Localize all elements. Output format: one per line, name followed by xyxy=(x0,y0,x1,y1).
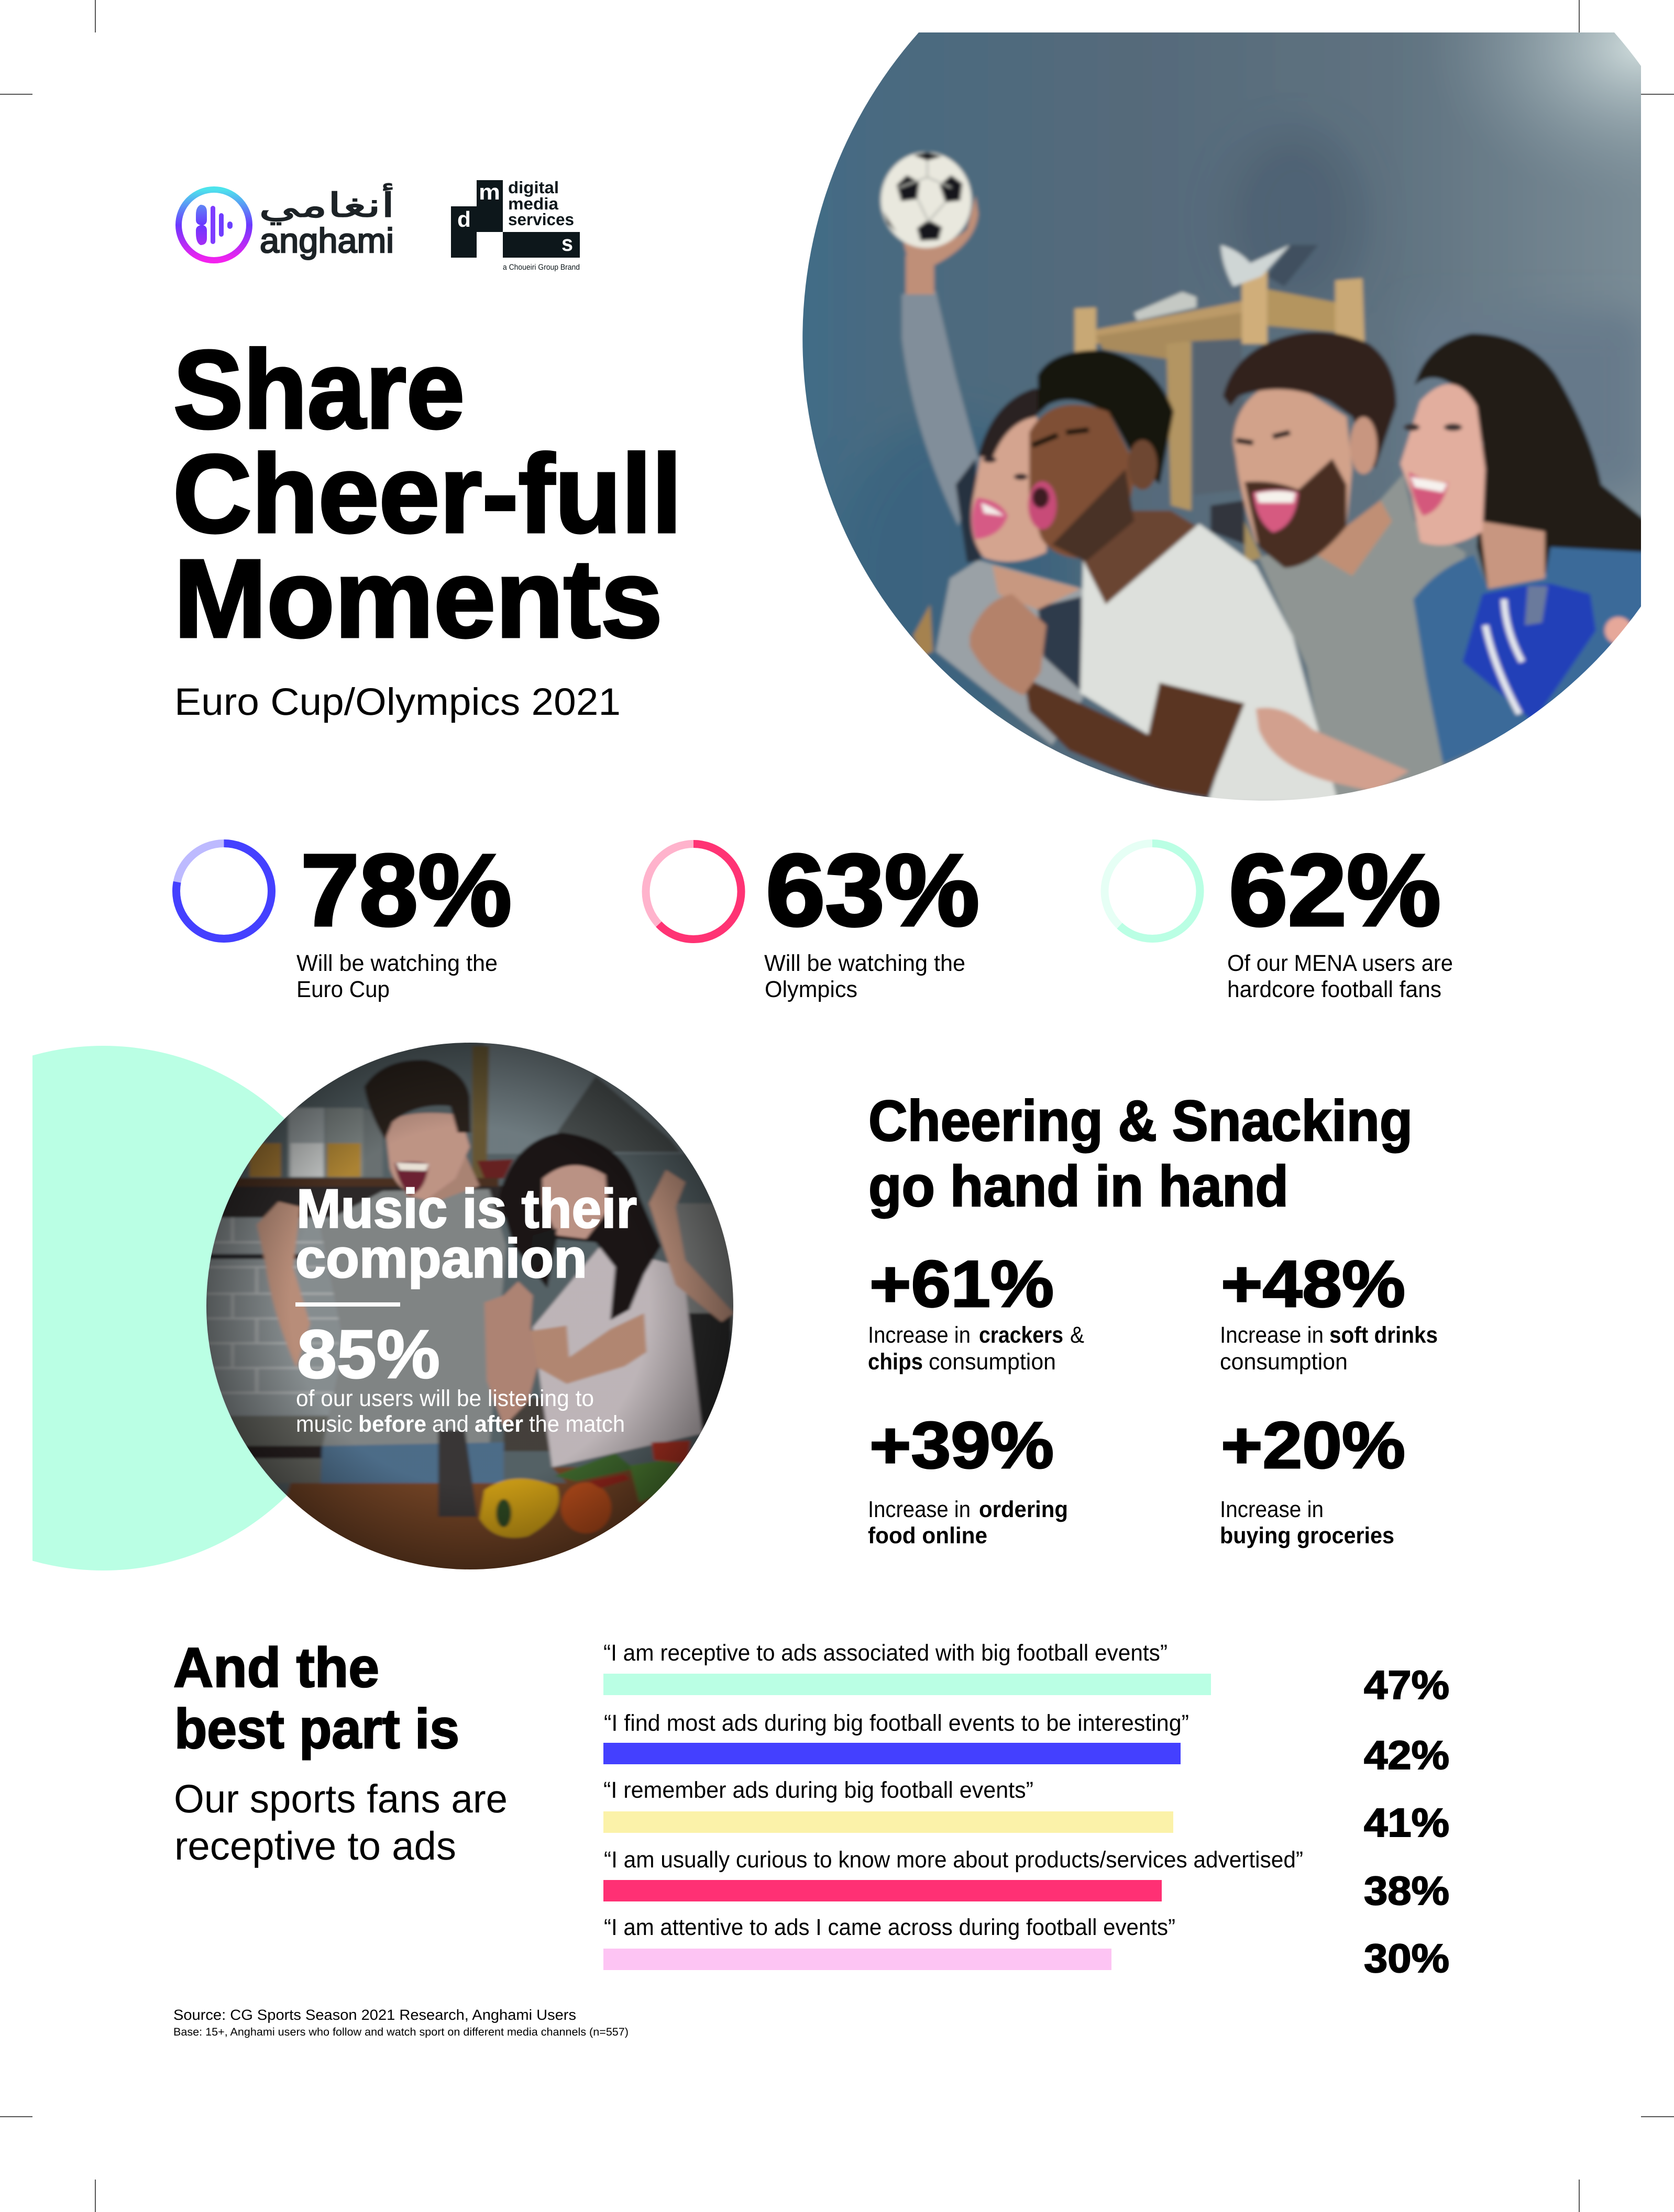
description xyxy=(296,1386,625,1437)
photo: friends cheering with a football xyxy=(802,32,1641,801)
wordmark: Arabic: أنغامي xyxy=(259,183,395,225)
logo: digital media services: m xyxy=(479,180,500,204)
mint background circle xyxy=(0,1046,366,1570)
description: before xyxy=(358,1411,426,1437)
statistic: 85% xyxy=(297,1315,440,1392)
heading: companion xyxy=(295,1228,587,1289)
stat: +39%: +39% xyxy=(869,1408,1054,1482)
bar: interesting 42%: “I find most ads during big football events to be interesting” xyxy=(604,1710,1189,1736)
subheading: Our sports fans are xyxy=(174,1777,508,1821)
icon: Anghami ring xyxy=(179,190,249,260)
stat: 78% Euro Cup xyxy=(176,833,512,1002)
callout: music is their companion xyxy=(295,1178,637,1437)
lower clenched hand xyxy=(1256,708,1409,792)
logo: digital media services: d xyxy=(457,207,471,231)
logo: digital media services xyxy=(451,178,580,272)
woman on left xyxy=(936,560,1083,745)
heading: Music is their xyxy=(296,1178,637,1240)
raised arm sleeve xyxy=(902,291,978,526)
stat: 62% football fans: hardcore football fans xyxy=(1227,977,1441,1002)
bar: receptive 47%: 47% xyxy=(1364,1663,1449,1708)
description: after xyxy=(475,1411,523,1437)
donut: 78% xyxy=(176,843,271,938)
stat: +61%: crackers xyxy=(979,1322,1063,1348)
stat: +61%: chips xyxy=(868,1349,923,1375)
bar: remember 41% xyxy=(603,1777,1449,1845)
title xyxy=(173,327,682,660)
logo: digital media services: media xyxy=(508,194,558,213)
stat: +20% xyxy=(1220,1408,1405,1549)
bar: interesting 42%: 42% xyxy=(1364,1733,1449,1778)
stat: +61%: Increase in xyxy=(868,1322,971,1348)
description: and xyxy=(432,1411,469,1437)
stat: +39%: ordering xyxy=(979,1497,1068,1522)
title: Moments xyxy=(174,536,663,660)
heading: Cheering & Snacking: go hand in hand xyxy=(868,1154,1288,1219)
heading: Cheering & Snacking: Cheering & Snacking xyxy=(868,1089,1413,1153)
logo: digital media services: services xyxy=(508,210,574,229)
donut: 63% xyxy=(646,844,741,939)
man singing xyxy=(320,1189,506,1447)
stat: +20%: buying groceries xyxy=(1220,1523,1394,1549)
woman singing xyxy=(533,1246,702,1467)
football xyxy=(881,152,972,248)
stat: +20%: +20% xyxy=(1221,1408,1405,1482)
stat: 78% Euro Cup: Will be watching the xyxy=(296,950,498,976)
source note xyxy=(173,2007,629,2038)
bar: curious 38%: “I am usually curious to know more about products/services advertised” xyxy=(604,1847,1303,1873)
description: music xyxy=(296,1411,353,1437)
stat: +48%: +48% xyxy=(1221,1247,1405,1321)
subtitle: Euro Cup/Olympics 2021 xyxy=(174,681,621,723)
logo: digital media services: a Choueiri Group Brand xyxy=(503,263,580,272)
subheading: receptive to ads xyxy=(174,1824,456,1868)
heading: And the best part is xyxy=(173,1636,459,1760)
stat: +61%: consumption xyxy=(929,1349,1056,1375)
logo: Anghami xyxy=(179,183,395,260)
donut: 62% xyxy=(1105,843,1200,938)
title: Share xyxy=(173,327,465,451)
source note: Source: CG Sports Season 2021 Research, Anghami Users xyxy=(173,2007,576,2023)
bar chart: attitudes to ads xyxy=(603,1640,1449,1981)
logo: digital media services: s xyxy=(561,231,573,256)
stat: 63% Olympics: 63% xyxy=(766,833,979,947)
bar: curious 38% xyxy=(603,1847,1449,1914)
stat: +48%: soft drinks xyxy=(1329,1322,1438,1348)
stat: +61%: & xyxy=(1070,1322,1084,1348)
bearded man xyxy=(1259,474,1466,797)
stat: 62% football fans xyxy=(1105,833,1453,1002)
wordmark: Latin: anghami xyxy=(260,221,394,260)
stat: +48% xyxy=(1220,1247,1438,1375)
forearm and hand xyxy=(904,195,978,294)
stat: 62% football fans: 62% xyxy=(1229,833,1441,947)
stat: +20%: Increase in xyxy=(1220,1497,1324,1522)
bar: attentive 30%: 30% xyxy=(1364,1936,1449,1981)
subheading xyxy=(174,1777,508,1868)
bar: receptive 47% xyxy=(603,1640,1449,1708)
title: Cheer-full xyxy=(173,432,682,556)
heading: And the best part is: best part is xyxy=(174,1697,459,1760)
stat: +48%: Increase in xyxy=(1220,1322,1324,1348)
stat: 78% Euro Cup: 78% xyxy=(301,833,512,947)
bar: interesting 42% xyxy=(603,1710,1449,1778)
stat: +39%: food online xyxy=(868,1523,987,1549)
bar: remember 41%: 41% xyxy=(1364,1800,1449,1845)
photo: couple dancing in kitchen xyxy=(194,1037,746,1575)
description: the match xyxy=(529,1411,625,1437)
bar: attentive 30% xyxy=(603,1915,1449,1981)
stat: 63% Olympics xyxy=(646,833,979,1002)
stat: +39% xyxy=(868,1408,1068,1549)
logo: digital media services: digital xyxy=(508,178,559,197)
kitchen counter with vegetables xyxy=(261,1467,688,1572)
source note: Base: 15+, Anghami users who follow and watch sport on different media channels (n=557) xyxy=(173,2026,629,2038)
stat: 63% Olympics: Will be watching the xyxy=(764,950,965,976)
heading: And the best part is: And the xyxy=(173,1636,379,1699)
stat: +39%: Increase in xyxy=(868,1497,971,1522)
stat: 62% football fans: Of our MENA users are xyxy=(1227,950,1453,976)
bar: curious 38%: 38% xyxy=(1364,1868,1449,1914)
heading: Cheering & Snacking xyxy=(868,1089,1413,1219)
stat: +48%: consumption xyxy=(1220,1349,1348,1375)
stat: +61%: +61% xyxy=(869,1247,1054,1321)
man in white t-shirt xyxy=(1038,350,1174,484)
stat: +61% xyxy=(868,1247,1084,1375)
bar: remember 41%: “I remember ads during big football events” xyxy=(603,1777,1033,1803)
woman on right xyxy=(1415,334,1647,589)
bar: attentive 30%: “I am attentive to ads I came across during football events” xyxy=(604,1915,1175,1940)
description: of our users will be listening to xyxy=(296,1386,594,1411)
heading xyxy=(295,1178,637,1289)
stat: 63% Olympics: Olympics xyxy=(765,977,857,1002)
bar: receptive 47%: “I am receptive to ads associated with big football events” xyxy=(603,1640,1168,1666)
stat: 78% Euro Cup: Euro Cup xyxy=(296,977,390,1002)
